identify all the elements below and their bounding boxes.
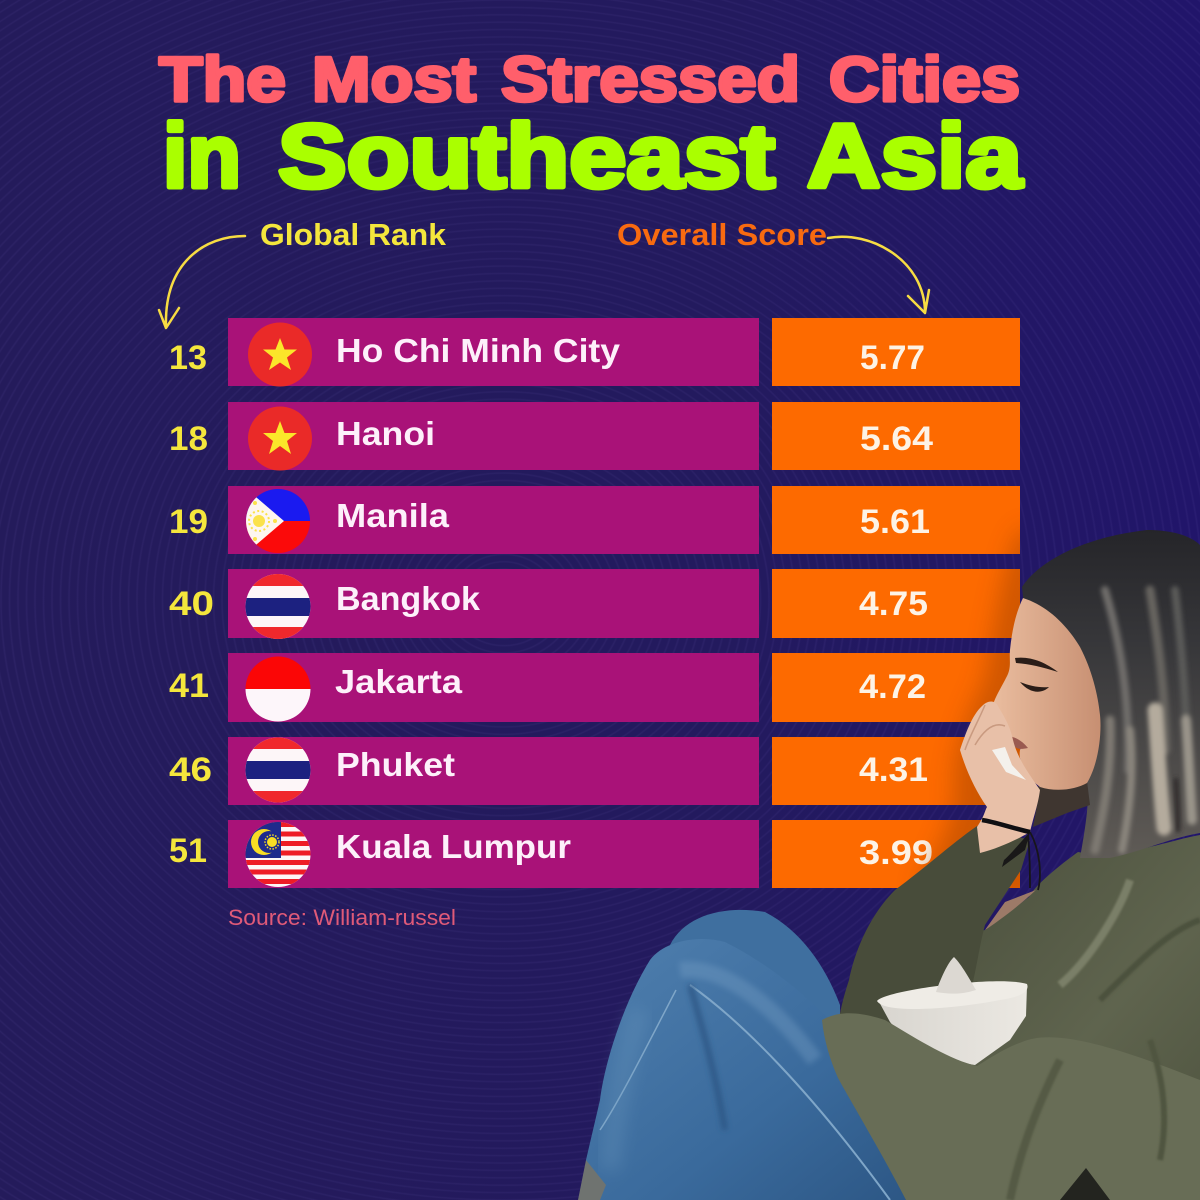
arrow: overall score to scores <box>828 237 929 313</box>
bracelet <box>1028 832 1040 890</box>
arrow: global rank to ranks <box>159 236 245 328</box>
jeans: front leg <box>586 939 918 1200</box>
city name: Ho Chi Minh City <box>336 332 621 369</box>
rank: 18 <box>169 420 208 458</box>
bracelet band <box>982 820 1030 832</box>
row: Phuket <box>169 737 1020 805</box>
score bar <box>772 486 1020 554</box>
rank: 41 <box>169 667 209 705</box>
city name: Hanoi <box>336 415 435 452</box>
score bar <box>772 653 1020 722</box>
hair strands <box>1095 590 1192 850</box>
title line 2 <box>163 107 1023 207</box>
tissue box <box>877 957 1028 1065</box>
row: Hanoi <box>169 402 1020 470</box>
city bar <box>228 402 759 470</box>
score bar <box>772 402 1020 470</box>
hair mass <box>1022 530 1200 858</box>
sweater: upper body <box>880 835 1200 1200</box>
title line 2: Southeast <box>278 107 775 207</box>
city name: Phuket <box>336 746 455 783</box>
title line 2: in <box>163 107 241 207</box>
box body <box>878 985 1027 1065</box>
flag: Vietnam <box>248 322 312 386</box>
eye <box>1020 682 1049 692</box>
city bar <box>228 486 759 554</box>
source note: Source: William-russel <box>228 905 456 930</box>
hand fingers <box>965 705 1005 750</box>
flag: Philippines <box>246 489 310 553</box>
skin gap between arm and body <box>985 890 1036 930</box>
score: 4.75 <box>859 585 928 623</box>
row: Manila <box>169 486 1020 556</box>
score bar <box>772 820 1020 888</box>
score: 3.99 <box>859 834 933 872</box>
rank: 13 <box>169 339 207 377</box>
rank: 19 <box>169 503 208 541</box>
sweater folds <box>1010 880 1200 1200</box>
tissue <box>936 957 976 994</box>
city bar <box>228 569 759 638</box>
title line 1 <box>159 45 1020 115</box>
row: Kuala Lumpur <box>169 820 1020 888</box>
title <box>159 45 1023 207</box>
row: Jakarta <box>169 653 1020 722</box>
title line 1: Most <box>312 45 476 115</box>
jeans cuff <box>578 1160 606 1200</box>
rank: 51 <box>169 832 207 870</box>
city bar <box>228 318 759 386</box>
city name: Kuala Lumpur <box>336 828 571 865</box>
sleeve: raised arm <box>839 826 1030 1030</box>
title line 1: Stressed <box>501 45 800 115</box>
flag: Malaysia <box>245 822 311 888</box>
row: Bangkok <box>169 569 1020 640</box>
score bar <box>772 737 1020 805</box>
title line 2: Asia <box>807 107 1023 207</box>
score bar <box>772 318 1020 386</box>
score: 4.31 <box>859 751 928 789</box>
score bar <box>772 569 1020 638</box>
header: overall score: Overall Score <box>617 217 827 252</box>
title line 1: Cities <box>829 45 1020 115</box>
jeans: seam and wash <box>600 970 890 1200</box>
rank: 40 <box>169 585 214 623</box>
box lid <box>877 981 1028 1009</box>
score: 5.64 <box>860 420 933 458</box>
city name: Bangkok <box>336 580 481 617</box>
tissue in hand <box>992 747 1026 780</box>
flag: Thailand <box>245 574 311 640</box>
city bar <box>228 737 759 805</box>
title line 1: The <box>159 45 286 115</box>
sleeve: lower arm <box>822 1013 1200 1200</box>
city name: Jakarta <box>335 663 463 700</box>
face <box>992 598 1100 790</box>
flag: Indonesia <box>245 656 311 722</box>
score: 4.72 <box>859 668 926 706</box>
city name: Manila <box>336 497 450 534</box>
jeans: back leg <box>670 910 840 1100</box>
hair under jaw <box>1033 781 1090 827</box>
sleeve cuff shadow <box>1002 832 1030 867</box>
photo: woman holding tissue box <box>578 530 1200 1200</box>
score: 5.61 <box>860 503 930 541</box>
city bar <box>228 653 759 722</box>
rank: 46 <box>169 751 212 789</box>
person shadow on score bars <box>914 524 1020 888</box>
dark shadow at base <box>1060 1168 1110 1200</box>
city bar <box>228 820 759 888</box>
score: 5.77 <box>860 339 925 377</box>
header: global rank: Global Rank <box>260 217 447 252</box>
flag: Vietnam <box>248 406 312 470</box>
flag: Thailand <box>245 737 311 803</box>
hand <box>960 702 1040 853</box>
row: Ho Chi Minh City <box>169 318 1020 386</box>
eyebrow <box>1015 658 1058 672</box>
lips <box>1012 737 1028 749</box>
